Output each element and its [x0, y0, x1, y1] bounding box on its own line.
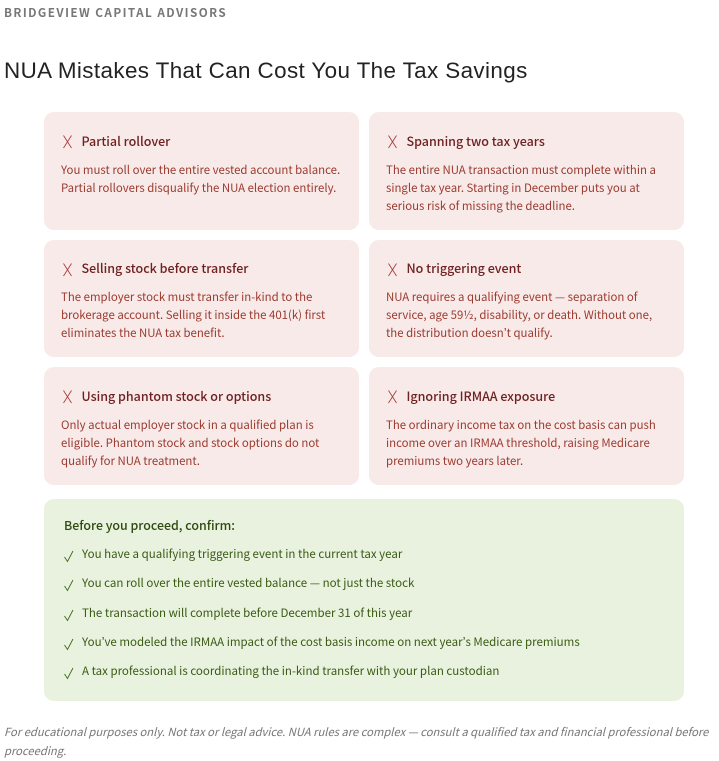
heading: No triggering event [406, 258, 521, 277]
heading: Ignoring IRMAA exposure [406, 386, 555, 405]
heading: Partial rollover [82, 131, 170, 150]
panel: confirmation checklist [44, 499, 684, 701]
panel: no triggering event [369, 240, 684, 357]
disclaimer: proceeding. [4, 743, 66, 759]
text block: Partial rollovers disqualify the NUA election entirely. [61, 180, 336, 196]
text block: The employer stock must transfer in-kind to the [61, 289, 312, 305]
text block [386, 417, 656, 469]
icon: cross [388, 390, 397, 404]
disclaimer [4, 724, 709, 759]
text block: Only actual employer stock in a qualified plan is [61, 417, 314, 433]
text block: premiums two years later. [386, 453, 523, 469]
text block: The ordinary income tax on the cost basis can push [386, 417, 656, 433]
text block: the distribution doesn’t qualify. [386, 325, 553, 341]
title: NUA Mistakes That Can Cost You The Tax Savings [4, 58, 528, 83]
text block [386, 162, 656, 214]
icon: cross [388, 263, 397, 276]
text block [61, 417, 320, 469]
panel: partial rollover [44, 112, 359, 230]
panel: selling stock before transfer [44, 240, 359, 357]
icon: cross [63, 390, 72, 404]
icon: cross [388, 135, 397, 148]
checklist item 5: A tax professional is coordinating the in-kind transfer with your plan custodian [82, 663, 499, 679]
text block: brokerage account. Selling it inside the 401(k) first [61, 307, 325, 323]
text block: eligible. Phantom stock and stock options do not [61, 435, 319, 451]
panel: ignoring IRMAA [369, 367, 684, 485]
text block: The entire NUA transaction must complete within a [386, 162, 656, 178]
panel: spanning two tax years [369, 112, 684, 230]
brand label: BRIDGEVIEW CAPITAL ADVISORS [4, 4, 227, 21]
text block: service, age 59½, disability, or death. Without one, [386, 307, 652, 323]
checklist item 4: You’ve modeled the IRMAA impact of the cost basis income on next year’s Medicare premiums [82, 634, 580, 650]
heading: Spanning two tax years [406, 131, 545, 150]
text block [386, 289, 652, 341]
disclaimer: For educational purposes only. Not tax or legal advice. NUA rules are complex — consult a qualified tax and financial professional before [4, 724, 708, 740]
heading: Selling stock before transfer [82, 258, 248, 277]
heading: Using phantom stock or options [82, 386, 271, 405]
panel: phantom stock [44, 367, 359, 485]
text block: serious risk of missing the deadline. [386, 198, 575, 214]
icon: cross [63, 135, 72, 148]
checklist item 1: You have a qualifying triggering event in the current tax year [82, 546, 402, 562]
text block: NUA requires a qualifying event — separation of [386, 289, 638, 305]
checklist item 3: The transaction will complete before December 31 of this year [82, 605, 412, 621]
text block: income over an IRMAA threshold, raising Medicare [386, 435, 650, 451]
text block [61, 162, 340, 196]
icon: cross [63, 263, 72, 276]
text block: eliminates the NUA tax benefit. [61, 325, 225, 341]
text block [61, 289, 325, 341]
checklist item 2: You can roll over the entire vested balance — not just the stock [82, 575, 414, 591]
text block: You must roll over the entire vested account balance. [61, 162, 340, 178]
text block: single tax year. Starting in December puts you at [386, 180, 640, 196]
text block: qualify for NUA treatment. [61, 453, 200, 469]
checklist heading: Before you proceed, confirm: [64, 516, 235, 534]
